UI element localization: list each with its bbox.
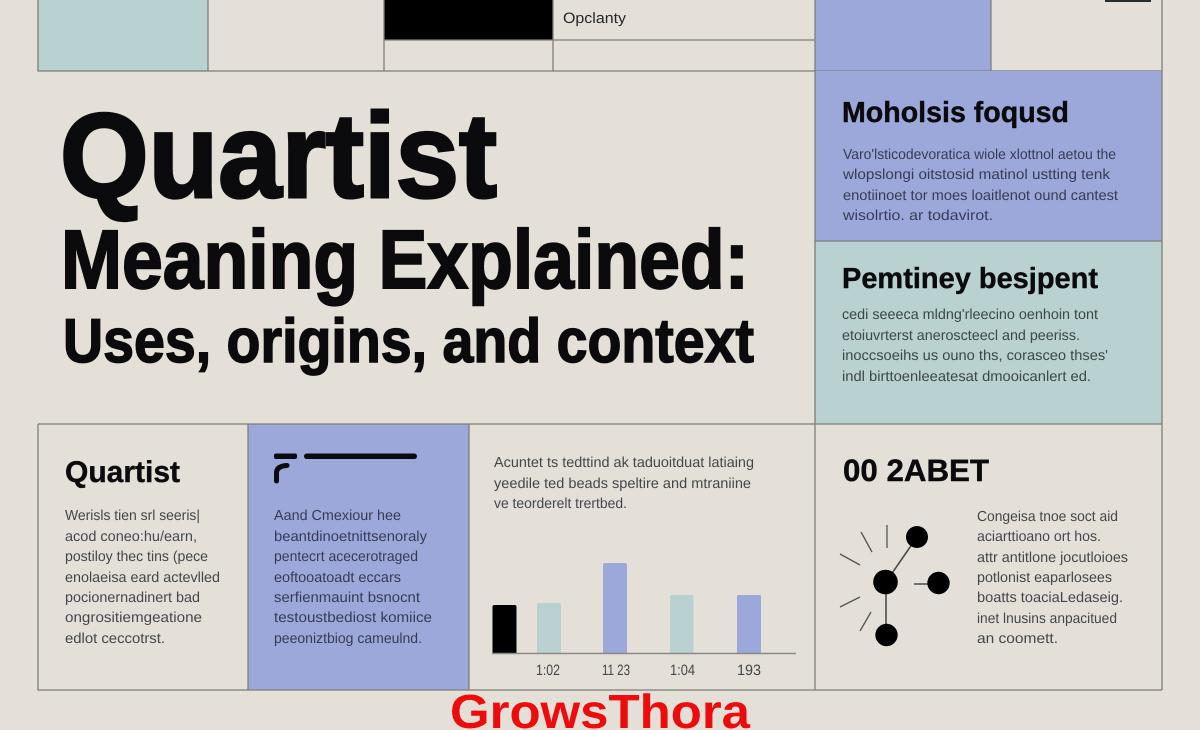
card body text: beantdinoetnittsenoraly	[274, 529, 428, 545]
card body text: Werisls tien srl seeris|	[65, 508, 200, 524]
card body text: testoustbediost komiice	[274, 610, 432, 626]
card body text: attr antitlone jocutloioes	[977, 550, 1128, 566]
panel: Aand Cmexiour	[248, 424, 469, 690]
card body text: Congeisa tnoe soct aid	[977, 509, 1118, 525]
card body text: aciarttioano ort hos.	[977, 529, 1101, 545]
card body text: an coomett.	[977, 631, 1058, 647]
card body text: edlot ceccotrst.	[65, 631, 165, 647]
panel: Pemtiney besjpent	[815, 241, 1162, 424]
opacity label: Opclanty	[563, 10, 627, 27]
card body text: enolaeisa eard actevlled	[65, 570, 220, 586]
dark corner fragment	[1105, 0, 1151, 2]
card body text: acod coneo:hu/earn,	[65, 529, 197, 545]
panel body text: cedi seeeca mldng'rleecino oenhoin tont	[842, 307, 1098, 323]
title line 2: Meaning Explained:	[61, 213, 749, 306]
panel body text	[842, 307, 1108, 385]
chart description: Acuntet ts tedttind ak taduoitduat latiaing	[494, 455, 754, 471]
card body text	[65, 508, 220, 647]
card body text: pentecrt acecerotraged	[274, 549, 418, 565]
panel: Moholsis foqusd	[815, 71, 1162, 241]
card heading: 00 2ABET	[843, 453, 989, 488]
card body text	[274, 508, 432, 647]
panel heading: Moholsis foqusd	[842, 97, 1069, 129]
chart description: yeedile ted beads speltire and mtraniine	[494, 476, 751, 492]
card body text: inet lnusins anpacitued	[977, 611, 1117, 627]
card body text: peeoniztbiog cameulnd.	[274, 631, 422, 647]
panel body text: Varo'lsticodevoratica wiole xlottnol aetou the	[843, 147, 1116, 163]
top strip	[38, 0, 1162, 71]
card body text: postiloy thec tins (pece	[65, 549, 208, 565]
panel body text: enotiinoet tor moes loaitlenot ound cantest	[843, 188, 1118, 204]
panel body text: inoccsoeihs us ouno ths, corasceo thses'	[842, 348, 1108, 364]
panel heading: Pemtiney besjpent	[842, 263, 1098, 295]
bar chart: 1:04	[670, 662, 695, 679]
title block	[60, 89, 754, 376]
panel body text	[842, 147, 1118, 224]
bar chart: 193	[737, 662, 761, 679]
bar chart: 11 23	[602, 662, 630, 679]
panel body text: indl birttoenleeatesat dmooicanlert ed.	[842, 369, 1091, 385]
chart description	[494, 455, 754, 512]
chart description: ve teorderelt trertbed.	[494, 496, 627, 512]
card body text	[977, 509, 1128, 647]
card body text: pocionernadinert bad	[65, 590, 200, 606]
icon: bar and hook glyph	[274, 454, 417, 481]
card body text: boatts toaciaLedaseig.	[977, 590, 1123, 606]
panel: chart card	[492, 455, 796, 679]
panel body text: wisolrtio. ar todavirot.	[842, 208, 993, 224]
teal block	[38, 0, 208, 71]
card body text: Aand Cmexiour hee	[274, 508, 401, 524]
panel body text: etoiuvrterst aneroscteecl and peeriss.	[842, 328, 1080, 344]
bar chart: 1:02	[536, 662, 560, 679]
panel: Quartist definition	[65, 456, 220, 647]
panel: 00 2ABET	[840, 453, 1128, 647]
card body text: potlonist eaparlosees	[977, 570, 1112, 586]
card body text: ongrositiemgeatione	[65, 610, 202, 626]
icon: node network	[840, 525, 950, 646]
black block	[384, 0, 553, 40]
card body text: eoftooatoadt eccars	[274, 570, 401, 586]
bar chart	[492, 563, 796, 679]
card heading: Quartist	[65, 456, 180, 489]
grid frame	[38, 71, 1162, 690]
title line 3: Uses, origins, and context	[63, 307, 754, 376]
title line 1: Quartist	[60, 89, 497, 223]
panel body text: wlopslongi oitstosid matinol ustting tenk	[842, 167, 1111, 183]
periwinkle block	[815, 0, 991, 71]
card body text: serfienmauint bsnocnt	[274, 590, 420, 606]
